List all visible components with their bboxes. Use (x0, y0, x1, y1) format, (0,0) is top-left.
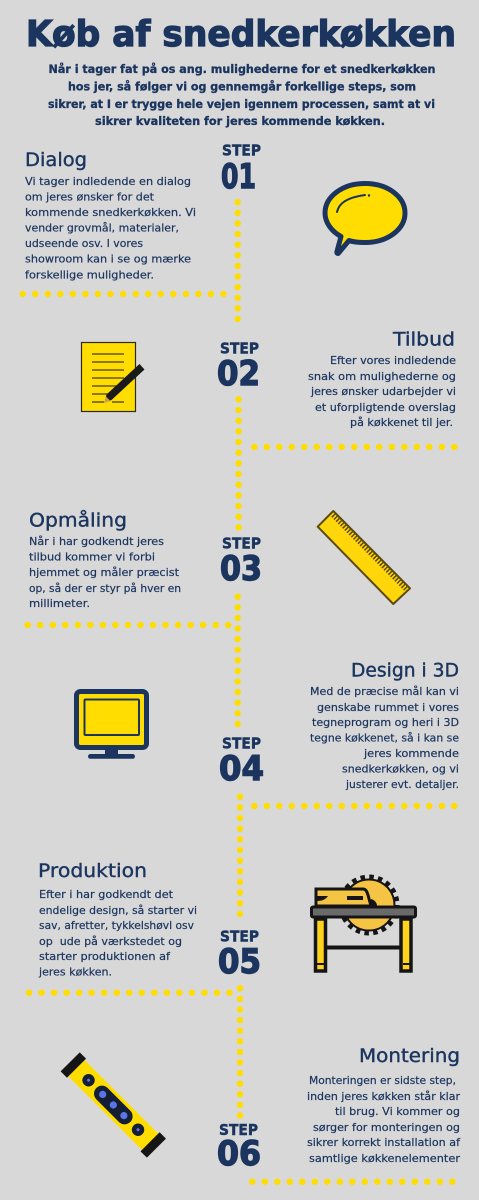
text block: Produktion: jeres køkken. (38, 966, 112, 979)
text block: Produktion: starter produktionen af (39, 950, 171, 963)
text block: Montering: til brug. Vi kommer og (335, 1105, 460, 1118)
step badge 01: 01 (221, 157, 256, 197)
dotted vertical timeline (238, 202, 240, 1116)
text block: Design i 3D: Med de præcise mål kan vi (310, 685, 459, 698)
icon: monitor (76, 692, 146, 759)
step badge 05: STEP (220, 928, 259, 946)
text block: Design i 3D: justerer evt. detaljer. (345, 778, 459, 791)
intro text: Når i tager fat på os ang. mulighederne for et snedkerkøkken (48, 62, 436, 76)
heading: Produktion: Produktion (38, 860, 147, 882)
text block: Design i 3D: snedkerkøkken, og vi (342, 763, 459, 776)
step badge 03: 03 (220, 549, 262, 589)
text block: Opmåling (29, 535, 181, 610)
text block: Tilbud: på køkkenet til jer. (350, 416, 453, 429)
step badge 05 (218, 928, 261, 982)
icon: document with pen (82, 342, 144, 412)
dotted horizontal dividers (23, 294, 455, 1182)
panel: step 6 montering (61, 1045, 461, 1174)
text block: Dialog: forskellige muligheder. (25, 268, 154, 282)
text block: Tilbud: snak om mulighederne og (308, 370, 456, 383)
text block: Dialog: udseende osv. I vores (25, 237, 143, 250)
heading: Tilbud: Tilbud (392, 329, 455, 351)
intro text: sikrer, at I er trygge hele vejen igennem processen, samt at vi (48, 97, 435, 111)
text block: Opmåling: tilbud kommer vi forbi (29, 551, 155, 564)
text block: Opmåling: op, så der er styr på hver en (29, 582, 181, 595)
text block: Tilbud: Efter vores indledende (330, 354, 456, 367)
text block: Design i 3D: tegne køkkenet, så i kan se (310, 732, 459, 745)
text block: Dialog: kommende snedkerkøkken. Vi (25, 206, 196, 219)
icon: table saw (312, 877, 416, 971)
step badge 04: 04 (219, 749, 264, 789)
heading: Design i 3D: Design i 3D (351, 660, 459, 682)
panel: step 2 tilbud (82, 329, 456, 429)
panel: step 5 produktion (38, 860, 415, 982)
text block: Dialog: vender grovmål, materialer, (25, 222, 179, 234)
text block: Montering: sikrer korrekt installation af (307, 1136, 461, 1149)
text block: Design i 3D: tegneprogram og heri i 3D (312, 716, 459, 729)
title: Køb af snedkerkøkken (26, 14, 456, 55)
text block: Design i 3D: genskabe rummet i vores (317, 701, 459, 714)
icon: speech bubble (325, 184, 405, 253)
text block: Dialog: Vi tager indledende en dialog (25, 175, 191, 188)
text block: Produktion (38, 888, 197, 979)
text block: Dialog: showroom kan i se og mærke (25, 252, 191, 266)
step badge 02: 02 (217, 354, 260, 394)
text block: Dialog (25, 175, 196, 282)
text block: Montering (307, 1074, 461, 1165)
icon: spirit level (61, 1052, 166, 1158)
text block: Opmåling: Når i har godkendt jeres (29, 535, 164, 548)
step badge 02: STEP (220, 339, 259, 357)
step badge 05: 05 (218, 942, 261, 982)
text block: Produktion: op ude på værkstedet og (39, 935, 182, 948)
heading: Dialog: Dialog (25, 149, 87, 171)
step badge 03 (220, 534, 262, 589)
text block: Tilbud: et uforpligtende overslag (315, 401, 456, 414)
step badge 02 (217, 339, 260, 394)
text block: Tilbud: jeres ønsker udarbejder vi (310, 385, 456, 398)
text block: Montering: inden jeres køkken står klar (307, 1090, 460, 1103)
heading: Opmåling: Opmåling (29, 509, 127, 532)
text block: Design i 3D (310, 685, 459, 791)
text block: Design i 3D: jeres kommende (363, 747, 459, 760)
text block: Montering: sørger for monteringen og (313, 1121, 460, 1134)
text block: Tilbud (308, 354, 456, 429)
text block: Dialog: om jeres ønsker for det (25, 190, 155, 204)
text block: Montering: Monteringen er sidste step, (309, 1074, 456, 1087)
step badge 06: 06 (217, 1134, 261, 1174)
text block: Produktion: Efter i har godkendt det (39, 888, 174, 901)
intro text: hos jer, så følger vi og gennemgår forkellige steps, som (68, 80, 416, 94)
icon: ruler (318, 511, 410, 604)
step badge 01 (221, 142, 261, 197)
step badge 03: STEP (222, 534, 261, 552)
step badge 06: STEP (219, 1121, 258, 1139)
text block: Montering: samtlige køkkenelementer (309, 1152, 460, 1165)
text block: Produktion: sav, afretter, tykkelshøvl osv (39, 919, 194, 932)
heading: Montering: Montering (359, 1045, 460, 1067)
text block: Opmåling: hjemmet og måler præcist (29, 566, 180, 579)
panel: step 4 design i 3D (76, 660, 459, 791)
panel: step 3 opmåling (29, 509, 410, 610)
panel: step 1 dialog (25, 142, 405, 282)
text block: Opmåling: millimeter. (29, 597, 90, 610)
step badge 04: STEP (222, 734, 261, 752)
intro text: sikrer kvaliteten for jeres kommende køkken. (95, 114, 385, 128)
step badge 01: STEP (222, 142, 261, 160)
intro text (48, 62, 436, 128)
text block: Produktion: endelige design, så starter vi (39, 904, 197, 917)
